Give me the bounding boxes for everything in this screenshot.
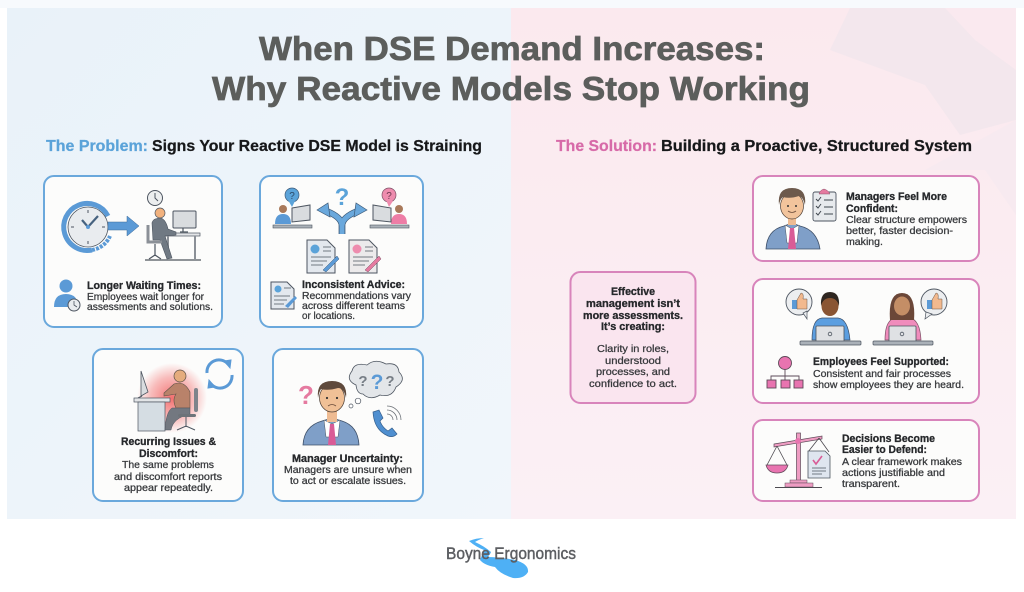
callout: effective management: It’s creating: — [601, 321, 665, 333]
callout: effective management: confidence to act. — [589, 379, 677, 390]
panel: decisions become easier to defend — [753, 420, 979, 501]
panel: inconsistent advice — [260, 176, 423, 327]
text: manager uncertainty — [284, 453, 412, 487]
top margin strip — [0, 0, 1024, 8]
text: employees feel supported: Consistent and fair processes — [813, 369, 951, 380]
icon: phone — [373, 406, 401, 437]
icon: thought cloud with question marks: ? — [371, 371, 383, 394]
text: managers feel more confident: Managers Feel More — [846, 191, 947, 203]
text: decisions become easier to defend — [842, 433, 962, 490]
logo: Boyne Ergonomics: Boyne Ergonomics — [446, 545, 576, 563]
panel background: solution side — [511, 8, 1016, 519]
icon: confident manager — [766, 188, 820, 249]
text: longer waiting times: Longer Waiting Times: — [87, 280, 201, 292]
icon: scales with document — [766, 433, 830, 488]
text: longer waiting times: assessments and solutions. — [87, 302, 213, 313]
text: managers feel more confident: Confident: — [846, 203, 898, 215]
panel background: problem side — [7, 8, 511, 519]
callout: effective management: more assessments. — [583, 310, 683, 322]
text: manager uncertainty: Manager Uncertainty: — [292, 453, 403, 465]
panel: managers feel more confident — [753, 176, 979, 261]
title: Why Reactive Models Stop Working — [212, 70, 810, 107]
text: employees feel supported — [813, 356, 964, 391]
text: recurring issues and discomfort: Recurring Issues & — [121, 436, 216, 448]
text: decisions become easier to defend: transparent. — [842, 479, 900, 490]
text: manager uncertainty: Managers are unsure when — [284, 465, 412, 476]
text: manager uncertainty: to act or escalate issues. — [290, 476, 406, 487]
callout: effective management — [570, 272, 696, 403]
icon: left person with question — [273, 188, 312, 228]
text: inconsistent advice: Inconsistent Advice: — [302, 279, 405, 291]
panel: manager uncertainty — [273, 349, 423, 501]
text: longer waiting times — [87, 280, 213, 313]
icon: clock with arrow — [64, 203, 139, 250]
text: recurring issues and discomfort — [114, 436, 222, 494]
heading: the solution: Building a Proactive, Structured System — [661, 138, 972, 155]
callout: effective management: management isn’t — [586, 298, 680, 310]
text: managers feel more confident: making. — [846, 237, 883, 248]
icon: left person with question: ? — [289, 191, 295, 202]
icon: person with clock — [54, 280, 80, 311]
text: decisions become easier to defend: A clear framework makes — [842, 457, 962, 468]
text: recurring issues and discomfort: Discomfort: — [139, 448, 198, 460]
icon: small document — [271, 282, 297, 309]
text: decisions become easier to defend: Easier to Defend: — [842, 444, 927, 456]
icon: person with discomfort glow — [134, 363, 207, 433]
icon: employee with thumbs up — [786, 289, 861, 345]
icon: worried manager — [303, 381, 359, 445]
icon: recurring arrows — [207, 360, 232, 388]
panel: longer waiting times — [44, 176, 222, 327]
text: recurring issues and discomfort: and discomfort reports — [114, 472, 222, 483]
icon: pink org chart — [767, 356, 803, 388]
panel: recurring issues and discomfort — [93, 349, 243, 501]
icon: right person with question — [370, 188, 409, 228]
text: inconsistent advice: or locations. — [302, 311, 355, 322]
text: inconsistent advice — [302, 279, 412, 322]
icon: forked arrow with question: ? — [335, 184, 349, 211]
callout: effective management: Clarity in roles, — [597, 344, 669, 355]
icon: blue document — [307, 240, 339, 273]
icon: right person with question: ? — [386, 191, 392, 202]
callout: effective management: processes, and — [596, 367, 670, 378]
text: employees feel supported: show employees they are heard. — [813, 380, 964, 391]
icon: thought cloud with question marks — [349, 361, 402, 408]
text: longer waiting times: Employees wait longer for — [87, 292, 205, 303]
icon: pink question mark: ? — [298, 380, 314, 410]
logo: Boyne Ergonomics — [446, 538, 576, 578]
callout: effective management: understood — [605, 356, 661, 367]
text: recurring issues and discomfort: appear repeatedly. — [124, 483, 213, 494]
title: When DSE Demand Increases: — [259, 30, 765, 67]
heading: the solution: The Solution: — [556, 138, 657, 155]
text: decisions become easier to defend: Decisions Become — [842, 433, 935, 445]
callout: effective management: Effective — [611, 286, 655, 298]
text: recurring issues and discomfort: The same problems — [122, 460, 214, 471]
icon: employee with thumbs up, second — [873, 289, 947, 345]
text: managers feel more confident: better, faster decision- — [846, 226, 953, 237]
icon: checklist clipboard — [813, 189, 836, 221]
icon: person at desk — [145, 190, 201, 260]
text: decisions become easier to defend: actions justifiable and — [842, 468, 945, 479]
heading: the problem: The Problem: — [46, 138, 148, 155]
text: managers feel more confident — [846, 191, 967, 248]
text: employees feel supported: Employees Feel Supported: — [813, 356, 949, 368]
icon: thought cloud with question marks: ? — [385, 373, 395, 390]
heading: the problem: Signs Your Reactive DSE Model is Straining — [152, 138, 482, 155]
title — [212, 30, 810, 107]
panel: employees feel supported — [753, 279, 979, 403]
text: inconsistent advice: across different teams — [302, 301, 405, 312]
text: inconsistent advice: Recommendations vary — [302, 291, 412, 302]
icon: thought cloud with question marks: ? — [358, 373, 368, 390]
icon: pink document — [349, 240, 381, 273]
text: managers feel more confident: Clear structure empowers — [846, 215, 967, 226]
icon: forked arrow with question — [317, 184, 367, 234]
